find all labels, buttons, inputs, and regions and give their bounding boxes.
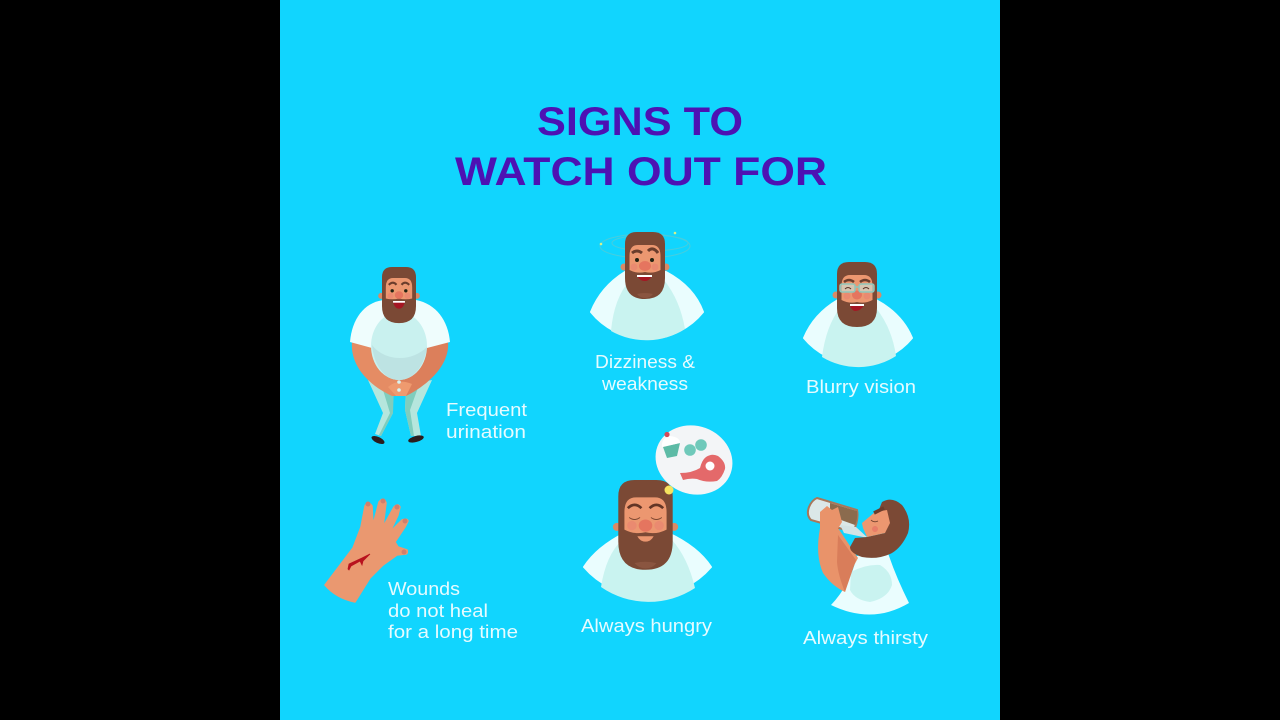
- label: always thirsty: Always thirsty: [803, 628, 928, 648]
- label: dizziness and weakness: weakness: [601, 374, 688, 394]
- icon: man drinking: [808, 498, 909, 615]
- panel: wounds: [325, 498, 518, 642]
- label: dizziness and weakness: Dizziness &: [595, 352, 695, 372]
- icon: head in profile: [850, 500, 909, 558]
- icon: man with glasses: [804, 262, 912, 367]
- icon: head, eyes closed: [613, 480, 678, 570]
- panel: always hungry: [581, 415, 742, 636]
- icon: yellow dot: [664, 486, 674, 494]
- panel: blurry vision: [804, 262, 916, 397]
- title: [455, 100, 827, 194]
- icon: head with glasses: [832, 262, 882, 327]
- icon: hand with cut: [325, 498, 408, 602]
- icon: full-body man: [350, 267, 450, 446]
- label: frequent urination: Frequent: [446, 400, 527, 420]
- label: frequent urination: urination: [446, 422, 526, 442]
- label: blurry vision: Blurry vision: [806, 377, 916, 397]
- panel: always thirsty: [803, 498, 928, 648]
- title: SIGNS TO: [537, 100, 743, 144]
- panel: dizziness: [591, 232, 703, 394]
- icon: bottle: [808, 498, 868, 538]
- label: wounds do not heal: for a long time: [388, 622, 518, 642]
- label: wounds do not heal: Wounds: [388, 579, 460, 599]
- label: always hungry: Always hungry: [581, 616, 712, 636]
- icon: thought bubble with food: [646, 415, 742, 505]
- icon: dizziness orbit: [600, 234, 690, 258]
- panel: frequent urination: [350, 267, 527, 446]
- icon: head: [620, 232, 670, 299]
- icon: head, mouth open: [378, 267, 420, 323]
- panel: blue background: [280, 0, 1000, 720]
- icon: dizzy man: [591, 232, 703, 340]
- icon: wound: [348, 554, 370, 570]
- label: wounds do not heal: do not heal: [388, 601, 488, 621]
- icon: hungry man: [584, 415, 742, 602]
- title: WATCH OUT FOR: [455, 150, 827, 194]
